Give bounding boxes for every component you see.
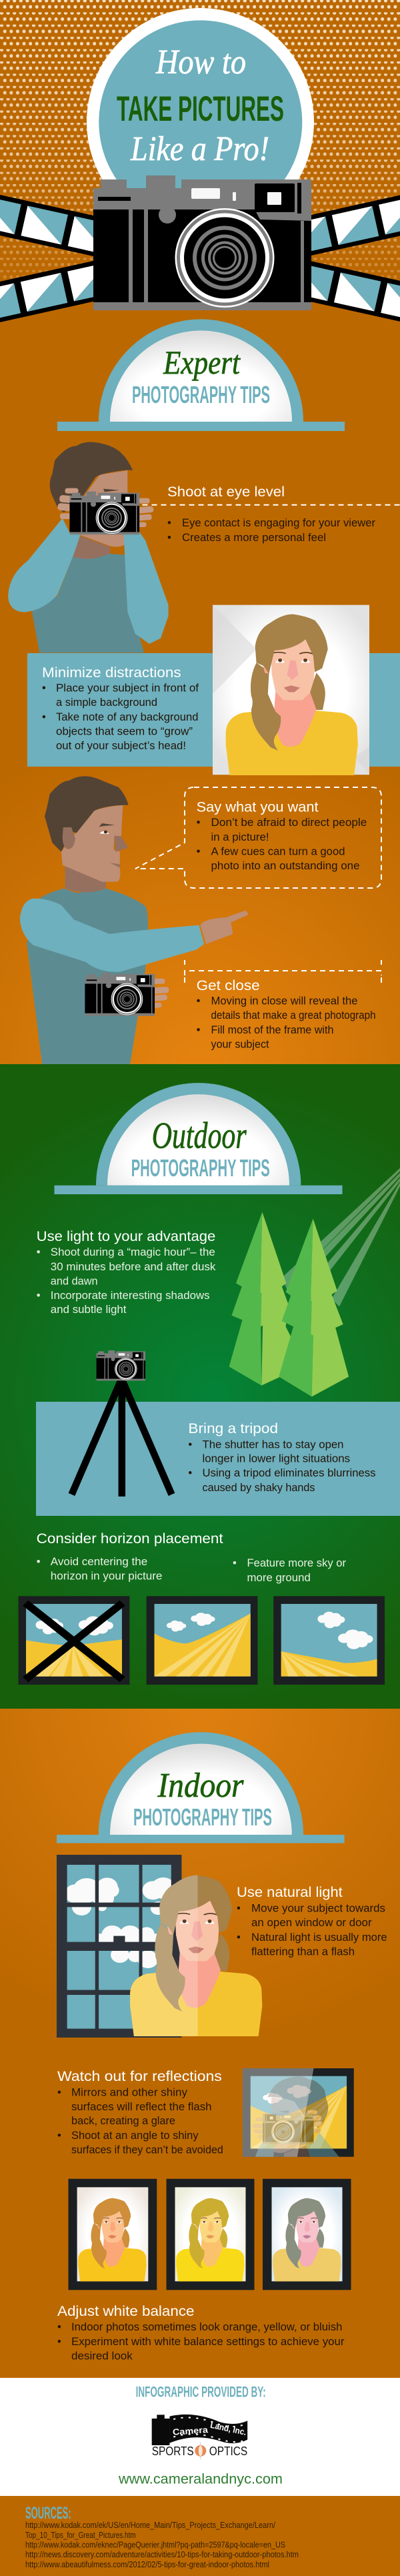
footer: provider band: INFOGRAPHIC PROVIDED BY:	[136, 2384, 266, 2401]
panel: bring a tripod: •	[188, 1439, 192, 1451]
heading: indoor photography tips	[57, 1732, 345, 1843]
tip: use light to your advantage	[37, 1228, 216, 1316]
tip: consider horizon placement: Avoid centering the	[51, 1556, 147, 1568]
photo: centered horizon, crossed out	[19, 1596, 129, 1685]
panel: minimize distractions: Take note of any background	[56, 711, 199, 723]
footer: provider band: www.cameralandnyc.com	[118, 2472, 283, 2487]
photo: low horizon with more ground	[147, 1596, 257, 1685]
heading: expert photography tips: Expert	[163, 344, 241, 381]
tip: consider horizon placement: •	[233, 1557, 237, 1569]
background: indoor section	[0, 1709, 400, 2378]
callout: say what you want	[135, 787, 381, 888]
panel: minimize distractions: out of your subject’s head!	[56, 740, 186, 752]
tip: shoot at eye level: Eye contact is engaging for your viewer	[182, 517, 375, 529]
footer: sources: Top_10_Tips_for_Great_Pictures.htm	[25, 2531, 136, 2540]
panel: minimize distractions	[27, 653, 400, 767]
tip: consider horizon placement: •	[37, 1556, 41, 1568]
title badge	[87, 8, 314, 236]
tip: shoot at eye level: •	[167, 517, 171, 529]
tip: use light to your advantage: Use light to your advantage	[37, 1228, 215, 1244]
photo: orange tint	[68, 2179, 157, 2290]
callout: say what you want: Say what you want	[197, 799, 319, 815]
panel: minimize distractions: Place your subject in front of	[56, 683, 199, 695]
tip: consider horizon placement: Consider horizon placement	[37, 1531, 223, 1547]
panel: minimize distractions: •	[42, 711, 46, 723]
logo: camera land sports optics: OPTICS	[209, 2445, 247, 2458]
tip: watch out for reflections: back, creating a glare	[71, 2115, 175, 2127]
tip: watch out for reflections: Shoot at an angle to shiny	[71, 2130, 199, 2142]
heading: outdoor photography tips: Outdoor	[152, 1116, 247, 1157]
panel: minimize distractions: a simple background	[56, 697, 157, 709]
tip: adjust white balance: Adjust white balance	[57, 2303, 195, 2319]
tip: watch out for reflections: surfaces if they can’t be avoided	[71, 2144, 223, 2156]
icon: camera on tripod	[72, 1350, 172, 1496]
tip: adjust white balance: •	[57, 2321, 61, 2333]
callout: say what you want: Don’t be afraid to direct people	[211, 817, 367, 829]
footer: sources: SOURCES:	[25, 2504, 71, 2523]
logo: camera land sports optics: SPORTS	[152, 2445, 194, 2458]
tip: use natural light	[237, 1884, 387, 1958]
tip: use light to your advantage: and dawn	[51, 1276, 98, 1288]
callout: get close: your subject	[211, 1039, 269, 1051]
panel: minimize distractions: Minimize distractions	[42, 665, 181, 681]
tip: use light to your advantage: Incorporate interesting shadows	[51, 1290, 210, 1302]
tip: use light to your advantage: •	[37, 1246, 41, 1258]
tip: use natural light: flattering than a flash	[251, 1946, 355, 1958]
footer: sources: http://www.kodak.com/eknec/PageQuerier.jhtml?pq-path=2597&pq-locale=en_US	[25, 2541, 285, 2550]
panel: bring a tripod: Using a tripod eliminates blurriness	[203, 1467, 376, 1479]
heading: expert photography tips: PHOTOGRAPHY TIPS	[132, 381, 270, 408]
footer: sources: http://news.discovery.com/adventure/activities/10-tips-for-taking-outdoor-photos.htm	[25, 2550, 299, 2559]
illustration: window with clouds	[57, 1855, 181, 2038]
illustration: man pointing with camera	[20, 776, 248, 1064]
tip: use light to your advantage: •	[37, 1290, 41, 1302]
callout: get close: •	[197, 1024, 201, 1036]
tip: use natural light: Move your subject towards	[251, 1903, 385, 1915]
tip: shoot at eye level: Creates a more personal feel	[182, 532, 326, 544]
callout: get close	[185, 960, 381, 1051]
photo: reflection of photographer on glass	[243, 2068, 354, 2157]
footer: sources	[0, 2496, 400, 2576]
tip: use natural light: •	[237, 1903, 241, 1915]
tip: watch out for reflections: •	[57, 2087, 61, 2099]
heading: outdoor photography tips: PHOTOGRAPHY TIPS	[131, 1154, 270, 1182]
footer: sources: http://www.abeautifulmess.com/2012/02/5-tips-for-great-indoor-photos.html	[25, 2560, 269, 2569]
panel: bring a tripod: Bring a tripod	[188, 1420, 278, 1436]
tip: watch out for reflections: surfaces will reflect the flash	[71, 2101, 212, 2113]
tip: consider horizon placement: horizon in your picture	[51, 1571, 162, 1583]
tip: watch out for reflections: Mirrors and other shiny	[71, 2087, 188, 2099]
heading: indoor photography tips: Indoor	[157, 1767, 244, 1805]
tip: use natural light: Use natural light	[237, 1884, 343, 1900]
tip: use light to your advantage: Shoot during a “magic hour”– the	[51, 1246, 215, 1258]
illustration: woman lit by window	[130, 1875, 262, 2036]
tip: shoot at eye level: Shoot at eye level	[167, 484, 285, 500]
photo set: white balance examples	[68, 2179, 351, 2290]
heading: indoor photography tips: PHOTOGRAPHY TIPS	[133, 1803, 272, 1831]
film strips	[0, 186, 400, 329]
footer: provider band	[0, 2378, 400, 2496]
logo: camera land sports optics: Land, Inc.	[209, 2420, 247, 2437]
heading: outdoor photography tips	[55, 1083, 343, 1194]
photo: yellow tint	[167, 2179, 255, 2290]
tip: shoot at eye level	[143, 484, 400, 544]
panel: bring a tripod: •	[188, 1467, 192, 1479]
panel: bring a tripod: The shutter has to stay open	[203, 1439, 344, 1451]
tip: consider horizon placement: Feature more sky or	[247, 1557, 346, 1569]
background: halftone dot pattern	[0, 0, 400, 287]
callout: get close: Moving in close will reveal the	[211, 995, 357, 1007]
logo: camera land sports optics	[152, 2415, 247, 2459]
photo: high horizon with more sky	[273, 1596, 385, 1685]
illustration: light rays and pine trees	[229, 1168, 400, 1396]
panel: bring a tripod: caused by shaky hands	[203, 1482, 315, 1494]
tip: consider horizon placement	[37, 1531, 346, 1584]
icon: main camera	[93, 175, 311, 310]
panel: minimize distractions: •	[42, 683, 46, 695]
background: outdoor section	[0, 1064, 400, 1709]
panel: minimize distractions: objects that seem to “grow”	[56, 726, 193, 738]
panel: bring a tripod: longer in lower light situations	[203, 1453, 350, 1465]
logo: camera land sports optics: Camera	[172, 2425, 209, 2437]
tip: adjust white balance: Indoor photos sometimes look orange, yellow, or bluish	[71, 2321, 342, 2333]
tip: adjust white balance: Experiment with white balance settings to achieve your	[71, 2336, 345, 2348]
heading: expert photography tips	[57, 319, 345, 431]
tip: watch out for reflections: •	[57, 2130, 61, 2142]
tip: adjust white balance	[57, 2303, 345, 2363]
callout: say what you want: in a picture!	[211, 831, 269, 843]
callout: say what you want: •	[197, 846, 201, 858]
illustration: man shooting at eye level	[8, 442, 169, 653]
tip: watch out for reflections	[57, 2068, 223, 2156]
title badge: TAKE PICTURES	[117, 89, 284, 129]
tip: use light to your advantage: and subtle light	[51, 1304, 127, 1316]
callout: get close: Fill most of the frame with	[211, 1024, 333, 1036]
footer: sources: http://www.kodak.com/ek/US/en/Home_Main/Tips_Projects_Exchange/Learn/	[25, 2521, 275, 2530]
photo: woman portrait	[213, 605, 369, 775]
title badge: Like a Pro!	[130, 130, 269, 168]
callout: get close: details that make a great photograph	[211, 1009, 376, 1021]
tip: use light to your advantage: 30 minutes before and after dusk	[51, 1261, 216, 1273]
panel: bring a tripod	[36, 1402, 400, 1516]
photo: blue tint	[263, 2179, 351, 2290]
callout: get close: •	[197, 995, 201, 1007]
tip: consider horizon placement: more ground	[247, 1572, 311, 1584]
callout: say what you want: A few cues can turn a good	[211, 846, 345, 858]
tip: use natural light: Natural light is usually more	[251, 1931, 387, 1944]
callout: say what you want: •	[197, 817, 201, 829]
tip: adjust white balance: •	[57, 2336, 61, 2348]
tip: adjust white balance: desired look	[71, 2350, 133, 2363]
title badge: How to	[155, 43, 246, 81]
callout: get close: Get close	[197, 977, 260, 993]
tip: shoot at eye level: •	[167, 532, 171, 544]
tip: use natural light: an open window or door	[251, 1917, 372, 1929]
background: expert section	[0, 0, 400, 1065]
tip: watch out for reflections: Watch out for reflections	[57, 2068, 222, 2084]
tip: use natural light: •	[237, 1931, 241, 1944]
callout: say what you want: photo into an outstanding one	[211, 860, 360, 872]
